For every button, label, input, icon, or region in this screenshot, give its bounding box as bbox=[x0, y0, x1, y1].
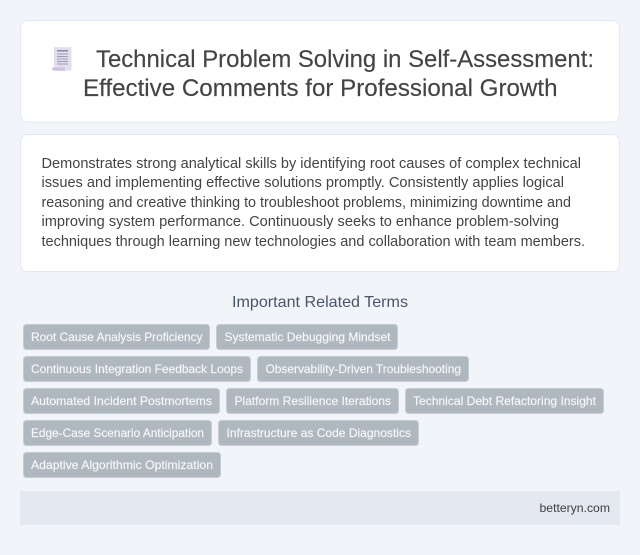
text block: description: Demonstrates strong analytical skills by identifying root causes of complex technical bbox=[42, 156, 581, 172]
tag: technical debt refactoring insight bbox=[406, 388, 604, 414]
text block: description: reasoning and creative thinking to troubleshoot problems, minimizing downtime and bbox=[42, 195, 571, 211]
footer source text: betteryn.com bbox=[540, 501, 610, 515]
heading: important related terms: Important Related Terms bbox=[232, 294, 408, 311]
tag: technical debt refactoring insight: Technical Debt Refactoring Insight bbox=[413, 394, 597, 408]
tag: infrastructure as code diagnostics: Infrastructure as Code Diagnostics bbox=[226, 426, 411, 440]
text block: description bbox=[42, 156, 585, 250]
title: Effective Comments for Professional Growth bbox=[83, 75, 558, 102]
tag: continuous integration feedback loops bbox=[24, 356, 250, 382]
footer bbox=[20, 491, 620, 525]
icon: paper scroll bbox=[52, 47, 72, 71]
tag: edge-case scenario anticipation: Edge-Case Scenario Anticipation bbox=[31, 426, 204, 440]
text block: description: issues and implementing effective solutions promptly. Consistently applies logical bbox=[42, 175, 564, 191]
panel: related terms tags bbox=[24, 324, 604, 478]
text block: description: techniques through learning new technologies and collaboration with team members. bbox=[42, 234, 585, 250]
tag: root cause analysis proficiency bbox=[24, 324, 210, 350]
tag: edge-case scenario anticipation bbox=[24, 420, 212, 446]
tag: infrastructure as code diagnostics bbox=[218, 420, 418, 446]
tag: automated incident postmortems bbox=[24, 388, 220, 414]
text block: description: improving system performance. Continuously seeks to enhance problem-solving bbox=[42, 214, 559, 230]
panel: title card bbox=[20, 20, 620, 122]
tag: adaptive algorithmic optimization: Adaptive Algorithmic Optimization bbox=[31, 458, 213, 472]
tag: continuous integration feedback loops: Continuous Integration Feedback Loops bbox=[31, 362, 243, 376]
tag: observability-driven troubleshooting bbox=[258, 356, 468, 382]
title: Technical Problem Solving in Self-Assessment: bbox=[96, 46, 594, 73]
tag: systematic debugging mindset: Systematic Debugging Mindset bbox=[224, 330, 391, 344]
tag: observability-driven troubleshooting: Observability-Driven Troubleshooting bbox=[266, 362, 461, 376]
tag: platform resilience iterations: Platform Resilience Iterations bbox=[234, 394, 391, 408]
tag: adaptive algorithmic optimization bbox=[24, 452, 220, 478]
tag: automated incident postmortems: Automated Incident Postmortems bbox=[31, 394, 212, 408]
title bbox=[83, 46, 594, 102]
tag: root cause analysis proficiency: Root Cause Analysis Proficiency bbox=[31, 330, 202, 344]
tag: platform resilience iterations bbox=[226, 388, 398, 414]
tag: systematic debugging mindset bbox=[216, 324, 398, 350]
panel: description card bbox=[20, 134, 620, 272]
